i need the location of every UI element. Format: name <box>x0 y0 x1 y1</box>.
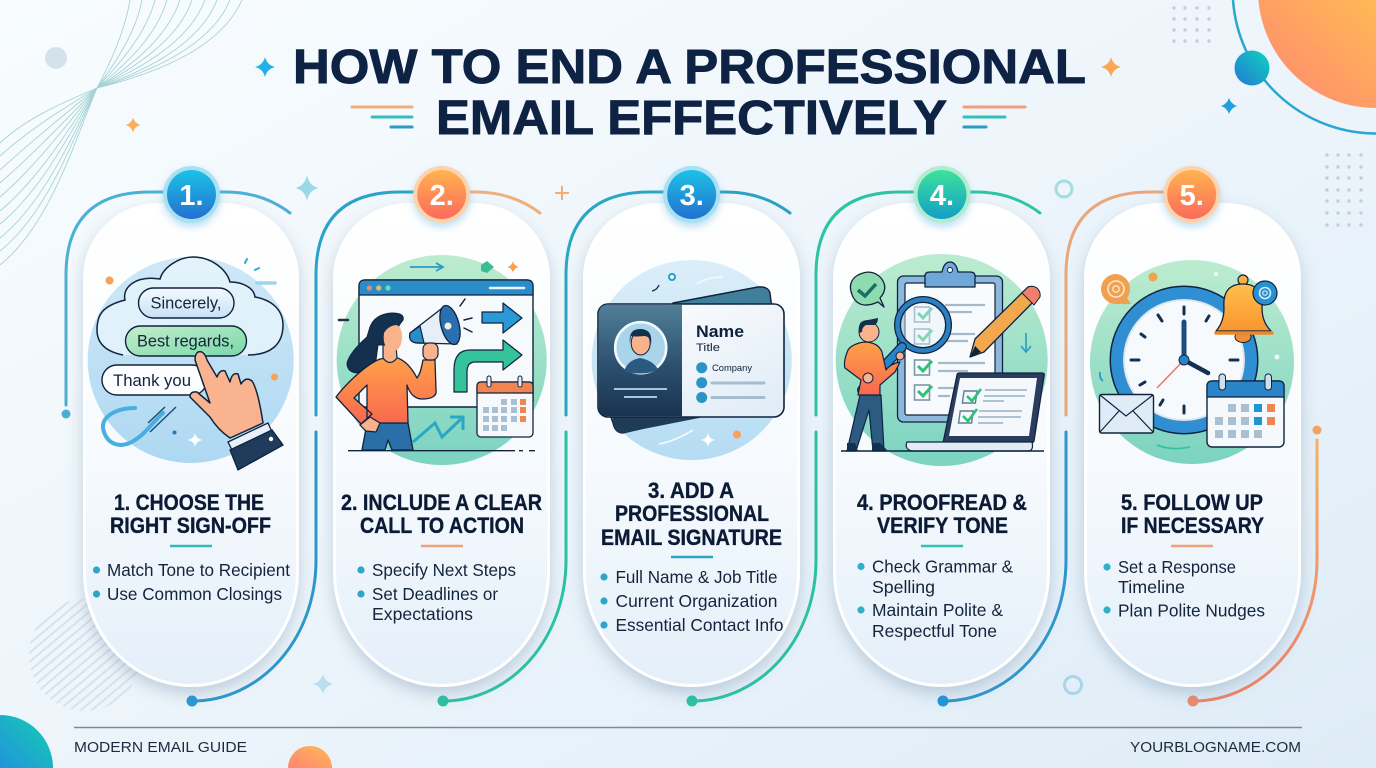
bullets 1 <box>93 560 290 604</box>
title sparkle right <box>1101 57 1121 77</box>
bullets 4: Spelling <box>872 577 935 597</box>
divider 1 <box>170 545 212 547</box>
bullets 5: Plan Polite Nudges <box>1118 600 1265 620</box>
floating ring <box>1056 181 1072 197</box>
heading 4: VERIFY TONE <box>877 513 1008 538</box>
icon: business card signature: Company <box>712 363 752 374</box>
title <box>293 41 1086 145</box>
panel: step 4 <box>834 166 1048 685</box>
panel: step 5 <box>1086 166 1300 686</box>
heading 3: EMAIL SIGNATURE <box>601 525 782 550</box>
bullets 3: Full Name & Job Title <box>616 567 778 587</box>
floating sparkle <box>295 175 319 201</box>
bullets 4: Maintain Polite & <box>872 600 1003 620</box>
heading 3: 3. ADD A <box>648 478 734 503</box>
decorative sun top right <box>1258 0 1376 108</box>
bullets 3 <box>600 567 784 635</box>
divider 4 <box>921 545 963 547</box>
badge 3 <box>663 166 720 223</box>
heading 1 <box>110 490 271 538</box>
dot grid top <box>1172 6 1211 43</box>
heading 2: CALL TO ACTION <box>360 513 524 538</box>
panel: step 3 <box>584 166 798 686</box>
decorative plus orange <box>127 119 139 131</box>
heading 5: IF NECESSARY <box>1121 513 1264 538</box>
bullets 4 <box>857 556 1013 641</box>
badge 3: 3. <box>680 180 704 212</box>
panel: step 1 <box>84 166 298 686</box>
badge 4: 4. <box>930 180 954 212</box>
badge 5: 5. <box>1180 180 1204 212</box>
hatched circle bottom left <box>29 599 141 711</box>
divider 2 <box>421 545 463 547</box>
corner circle bottom left <box>0 715 53 768</box>
badge 1: 1. <box>179 180 204 212</box>
footer: MODERN EMAIL GUIDE <box>74 740 247 756</box>
panel: step 2 <box>334 166 548 686</box>
title sparkle left <box>255 57 275 77</box>
footer: YOURBLOGNAME.COM <box>1130 740 1301 756</box>
bullets 5: Set a Response <box>1118 557 1236 577</box>
bullets 2: Specify Next Steps <box>372 560 516 580</box>
heading 1: 1. CHOOSE THE <box>114 490 264 515</box>
badge 5 <box>1163 166 1220 223</box>
icon: sign-off options with pointing hand <box>88 257 294 470</box>
bullets 4: Respectful Tone <box>872 621 997 641</box>
title: HOW TO END A PROFESSIONAL <box>293 41 1086 94</box>
bullets 3: Current Organization <box>616 591 778 611</box>
bullets 2 <box>357 560 516 624</box>
bullets 2: Expectations <box>372 604 473 624</box>
divider 5 <box>1171 545 1213 547</box>
card 2 <box>334 204 548 686</box>
decorative ring top right <box>1233 0 1376 134</box>
heading 5 <box>1121 490 1264 538</box>
floating sparkle bottom <box>313 674 333 694</box>
decorative ball <box>1234 50 1270 86</box>
icon: sign-off options with pointing hand: Best regards, <box>137 332 234 350</box>
floating ring bottom <box>1064 676 1082 694</box>
title lines right <box>964 107 1025 127</box>
card 3 <box>584 204 798 686</box>
heading 3 <box>601 478 782 550</box>
heading 5: 5. FOLLOW UP <box>1121 490 1263 515</box>
bullets 1: Match Tone to Recipient <box>107 560 290 580</box>
icon: sign-off options with pointing hand: Sincerely, <box>150 294 222 312</box>
decorative sparkle blue <box>1221 98 1237 114</box>
orange circle bottom <box>288 746 332 768</box>
footer <box>74 728 1302 756</box>
dot grid right <box>1325 153 1363 227</box>
card 5 <box>1086 204 1300 686</box>
heading 2: 2. INCLUDE A CLEAR <box>341 490 542 515</box>
icon: sign-off options with pointing hand: Thank you <box>113 371 191 390</box>
icon: proofreading checklist <box>836 254 1048 466</box>
decorative dot top left <box>45 47 67 69</box>
icon: clock, bell, envelope and calendar <box>1090 260 1294 464</box>
icon: business card signature: Name <box>696 322 744 341</box>
decorative wave lines top left <box>0 0 242 265</box>
icon: business card signature: Title <box>696 342 720 354</box>
heading 2 <box>341 490 542 538</box>
bullets 5 <box>1103 557 1265 620</box>
icon: business card signature <box>592 260 792 460</box>
bullets 3: Essential Contact Info <box>616 615 784 635</box>
badge 2: 2. <box>430 180 454 212</box>
badge 4 <box>914 166 970 223</box>
bullets 4: Check Grammar & <box>872 556 1013 576</box>
card 1 <box>84 204 298 686</box>
heading 3: PROFESSIONAL <box>615 501 769 526</box>
bullets 5: Timeline <box>1118 577 1185 597</box>
title: EMAIL EFFECTIVELY <box>436 92 947 145</box>
heading 1: RIGHT SIGN-OFF <box>110 513 271 538</box>
bullets 2: Set Deadlines or <box>372 584 498 604</box>
card 4 <box>834 204 1048 685</box>
bullets 1: Use Common Closings <box>107 584 282 604</box>
badge 2 <box>413 166 470 223</box>
title lines left <box>352 107 412 127</box>
heading 4 <box>857 490 1027 538</box>
connector lines <box>62 192 1322 706</box>
icon: woman with megaphone and call to action <box>336 255 547 465</box>
divider 3 <box>671 556 713 558</box>
floating plus <box>555 186 569 200</box>
heading 4: 4. PROOFREAD & <box>857 490 1027 515</box>
badge 1 <box>163 166 220 223</box>
